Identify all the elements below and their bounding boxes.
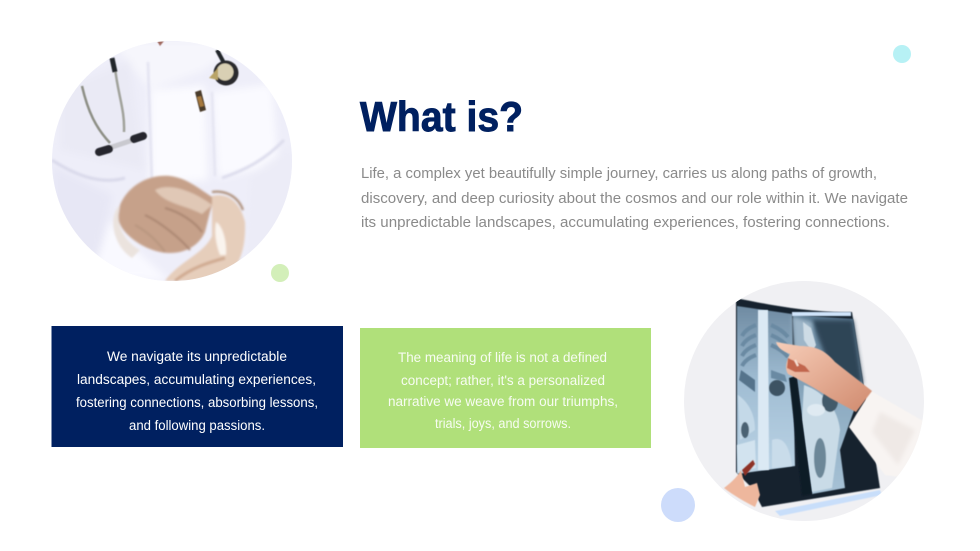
spine and ribs, left view <box>737 310 792 472</box>
panel: navy text box: We navigate its unpredictable <box>107 349 287 364</box>
hand holding film <box>724 460 760 507</box>
pen <box>195 90 206 112</box>
panel: navy text box: fostering connections, absorbing lessons, <box>76 395 318 410</box>
title: What is? <box>360 93 523 140</box>
dot: light blue <box>661 488 695 522</box>
panel: navy text box <box>52 326 343 447</box>
panel: green text box: trials, joys, and sorrows. <box>435 416 571 431</box>
panel: green text box: concept; rather, it's a personalized <box>401 373 605 388</box>
dot: cyan <box>893 45 911 63</box>
body text: its unpredictable landscapes, accumulating experiences, fostering connections. <box>361 214 890 231</box>
body text: discovery, and deep curiosity about the cosmos and our role within it. We navigate <box>361 190 908 207</box>
sleeve <box>848 398 878 465</box>
panel: navy text box: landscapes, accumulating experiences, <box>77 372 316 387</box>
photo: doctor pointing at x-ray <box>684 281 930 521</box>
stethoscope <box>115 68 124 132</box>
spine, right view <box>802 322 840 492</box>
panel: green text box: narrative we weave from our triumphs, <box>388 394 618 409</box>
photo: doctor in white coat <box>52 41 292 281</box>
gloved hands <box>113 176 245 281</box>
x-ray film <box>736 298 882 516</box>
slide <box>52 41 924 522</box>
body text <box>361 165 908 231</box>
panel: green text box <box>360 328 651 448</box>
panel: green text box: The meaning of life is not a defined <box>398 350 607 365</box>
panel: navy text box: and following passions. <box>129 418 265 433</box>
body text: Life, a complex yet beautifully simple journey, carries us along paths of growth, <box>361 165 877 182</box>
pointing hand <box>776 342 872 412</box>
dot: light green <box>271 264 289 282</box>
